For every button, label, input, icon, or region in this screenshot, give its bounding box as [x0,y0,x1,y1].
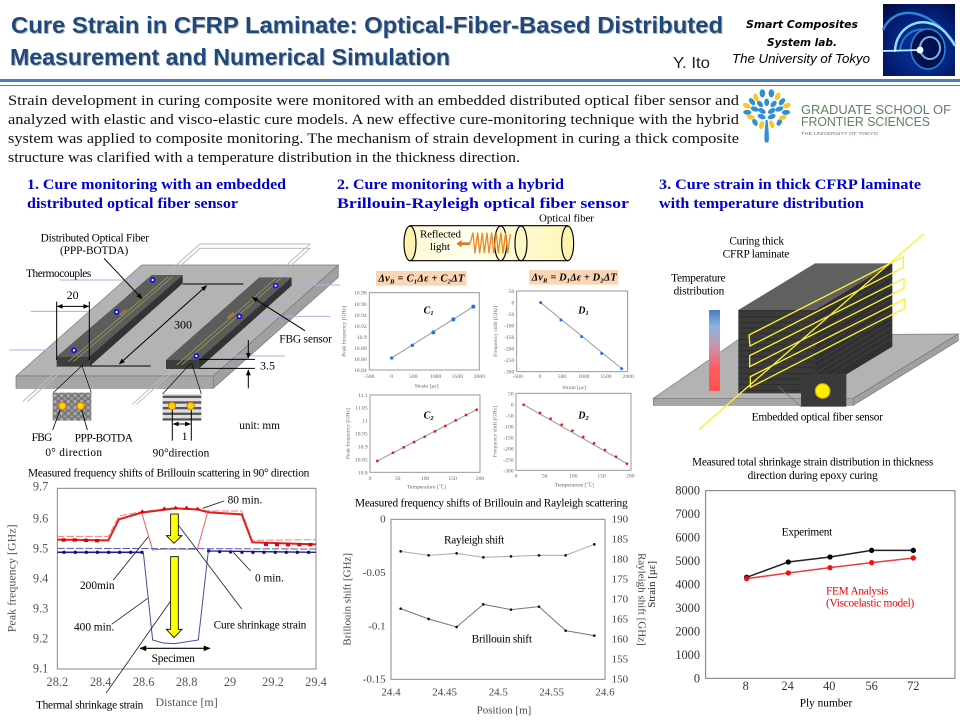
y ticks [675,484,700,685]
x ticks: 28.6 [133,675,154,689]
y ticks: 3000 [675,601,700,615]
x ticks: 24 [781,679,794,693]
diagram labels: 90°direction [153,448,210,460]
intro text block: structure was clarified with a temperature distribution in the thickness direction. [8,150,520,166]
laminate labels: distribution [674,286,725,298]
right axis ticks: 190 [612,514,629,526]
chart: C1 strain vs peak frequency: 1 [430,310,434,317]
axis titles: Ply number [800,698,852,710]
diagram labels: 300 [174,318,192,332]
chart: D1 strain vs frequency shift: 0 [511,301,514,307]
icon: lab swirl logo [883,4,955,76]
chart: C1 strain vs peak frequency: 10.9 [357,335,367,341]
intro text block: analyzed with elastic and visco-elastic cure models. A new effective cure-monitoring technique with the hybrid [8,112,740,128]
chart: D2 temperature vs frequency shift: Temperature [℃] [555,482,594,489]
diagram labels: PPP-BOTDA [75,433,134,445]
chart: D2 temperature vs frequency shift: 200 [626,474,635,480]
series: 400 min [143,551,208,644]
laminate labels: Embedded optical fiber sensor [752,412,883,424]
fiber labels [420,213,594,253]
chart: C1 strain vs peak frequency: 1500 [452,374,463,380]
diagram labels: (PPP-BOTDA) [60,245,129,257]
chart: D1 strain vs frequency shift: D [578,305,586,316]
chart: D2 temperature vs frequency shift: -300 [503,468,514,474]
chart annotations: Specimen [152,653,195,665]
x axis ticks: 24.45 [432,687,458,699]
chart: C2 temperature vs peak frequency: 50 [395,476,401,482]
chart: D1 strain vs frequency shift: -200 [504,347,514,353]
diagram: thick CFRP laminate [653,234,958,429]
chart: D2 temperature vs frequency shift: 2 [585,415,590,422]
equation: Rayleigh: R [542,277,548,284]
x axis ticks: 24.4 [381,687,401,699]
graduate school wordmark: THE UNIVERSITY OF TOKYO [801,131,879,136]
x ticks: 72 [907,679,919,693]
x axis ticks [381,687,615,699]
chart: C1 strain vs peak frequency: 10.92 [354,324,367,330]
series labels: (Viscoelastic model) [826,598,915,610]
chart: D2 temperature vs frequency shift: -100 [503,424,514,430]
x ticks [47,675,327,689]
x axis ticks: 24.55 [539,687,565,699]
equation: Rayleigh: Δε + D [569,272,601,283]
chart: C1 strain vs peak frequency [341,291,485,390]
intro text block [8,93,740,166]
left axis ticks: 0 [380,514,386,526]
chart caption: direction during epoxy curing [748,470,878,482]
chart: C1 strain vs peak frequency: 10.98 [354,291,367,297]
title: Measurement and Numerical Simulation [10,44,450,70]
cross section 0 degree [53,393,91,430]
chart: D1 strain vs frequency shift [492,289,634,391]
dimension lines [53,258,305,394]
chart annotations: 0 min. [255,572,284,584]
y ticks [33,479,48,676]
temperature gradient bar [709,310,720,391]
y ticks: 5000 [675,554,700,568]
series: FEM analysis [744,555,916,581]
chart: C1 strain vs peak frequency: 2000 [474,374,485,380]
series labels: Experiment [782,526,833,538]
intro text block: system was applied to composite monitoring. The mechanism of strain development in curing a thick composite [8,131,739,147]
chart: D1 strain vs frequency shift: -500 [512,374,523,380]
fiber labels: Optical fiber [539,213,594,225]
heading: section 3: with temperature distribution [659,196,865,212]
right axis ticks [612,514,629,686]
heading: section 1 [27,177,287,212]
chart: D1 strain vs frequency shift: Strain [με] [562,385,586,391]
thermocouple points [72,278,278,358]
x axis ticks: 24.6 [595,687,615,699]
yellow arrow: cure shrinkage [166,514,182,543]
y ticks: 9.5 [33,541,48,555]
series labels [444,534,533,645]
chart: C1 strain vs peak frequency: 10.86 [354,357,367,363]
cross section 90 degree [163,394,201,441]
right axis ticks: 150 [612,674,629,686]
right axis ticks: 185 [612,534,629,546]
chart: C2 temperature vs peak frequency [345,393,484,491]
equation: Rayleigh: = D [548,272,567,283]
chart: C2 temperature vs peak frequency: C [424,410,430,421]
double rule [0,79,960,82]
chart: C1 strain vs peak frequency: Strain [με] [415,384,439,390]
chart: D2 temperature vs frequency shift: -50 [506,413,514,419]
heading: section 2: Brillouin-Rayleigh optical fiber sensor [337,196,629,212]
chart: D1 strain vs frequency shift: -250 [504,358,514,364]
equation: Brillouin: 1 [414,278,417,285]
chart: D2 temperature vs frequency shift: D [578,410,586,421]
equation: Brillouin: ΔT [450,273,465,284]
chart: Brillouin and Rayleigh shift vs position: Brillouin shift [GHz] [342,553,354,646]
right axis ticks: 180 [612,554,629,566]
y ticks: 9.1 [33,662,48,676]
right axis ticks: 170 [612,594,629,606]
chart: D1 strain vs frequency shift: Frequency shift [GHz] [492,306,499,357]
chart: Brillouin and Rayleigh shift vs position: Rayleigh shift [GHz] [635,553,647,646]
x ticks: 28.4 [90,675,111,689]
laminate block [738,263,892,393]
axis titles: Position [m] [477,704,531,716]
diagram labels: 3.5 [260,359,275,373]
x ticks: 28.2 [47,675,68,689]
chart: C1 strain vs peak frequency: -500 [364,374,375,380]
equation: Rayleigh: 1 [567,277,570,284]
series: 0 min [57,548,316,554]
x ticks: 8 [743,679,749,693]
chart: C1 strain vs peak frequency: 500 [409,374,418,380]
fiber loops [23,244,310,404]
chart: C2 temperature vs peak frequency: 2 [429,415,434,422]
diagram labels: 1 [182,429,188,443]
diagram: specimen with embedded sensors [9,232,340,460]
graduate school wordmark: GRADUATE SCHOOL OF [801,103,951,117]
lab name [732,18,870,66]
x ticks: 29 [224,675,236,689]
chart: Brillouin and Rayleigh shift vs position [342,498,647,716]
chart: Brillouin peak frequency vs distance [4,468,327,711]
chart: D2 temperature vs frequency shift [491,391,635,489]
heading: section 2 [337,177,629,212]
intro text block: Strain development in curing composite were monitored with an embedded distributed optical fiber sensor and [8,93,740,109]
series: 80 min [57,506,316,550]
y ticks: 9.6 [33,511,48,525]
chart: D2 temperature vs frequency shift: -150 [503,435,514,441]
x ticks: 29.2 [262,675,284,689]
chart: C1 strain vs peak frequency: 0 [390,374,393,380]
chart: C2 temperature vs peak frequency: Temperature [℃] [407,484,446,491]
series labels: Brillouin shift [472,633,533,645]
y ticks: 2000 [675,624,700,638]
chart: C1 strain vs peak frequency: 10.88 [354,346,367,352]
chart caption [692,457,933,482]
yellow arrow: thermal shrinkage [166,557,182,638]
chart: total shrinkage strain vs ply number [646,457,955,710]
heading: section 3: 3. Cure strain in thick CFRP laminate [659,177,921,193]
chart annotations: Thermal shrinkage strain [36,699,144,711]
x ticks: 56 [865,679,878,693]
chart: C2 temperature vs peak frequency: 200 [476,476,484,482]
y ticks: 4000 [675,577,700,591]
chart: D1 strain vs frequency shift: 50 [509,289,514,295]
equation: Rayleigh: ΔT [603,272,617,283]
chart: C1 strain vs peak frequency: 10.84 [354,368,367,374]
chart: D2 temperature vs frequency shift: 50 [542,474,548,480]
equation: Brillouin [376,271,467,286]
diagram labels [26,232,332,460]
left axis ticks: -0.15 [363,674,386,686]
chart: D1 strain vs frequency shift: 1500 [600,374,612,380]
chart: C2 temperature vs peak frequency: 11.1 [358,393,368,399]
chart annotations: 200min [80,580,115,592]
embedded sensor cross section [778,374,846,407]
chart annotations: Cure shrinkage strain [214,619,307,631]
title [10,12,723,70]
title: Cure Strain in CFRP Laminate: Optical-Fiber-Based Distributed [11,12,723,38]
chart: C2 temperature vs peak frequency: 150 [448,476,457,482]
chart: D2 temperature vs frequency shift: Frequency shift [GHz] [491,406,498,457]
chart: Brillouin peak frequency vs distance: Distance [m] [156,695,218,709]
chart annotations: 80 min. [228,494,262,506]
axis titles: Peak frequency [GHz] [4,524,18,632]
diagram labels: FBG sensor [279,333,332,345]
y ticks: 7000 [675,507,700,521]
series labels: FEM Analysis [826,585,888,597]
chart: C2 temperature vs peak frequency: 10.8 [358,470,368,476]
chart: D1 strain vs frequency shift: 500 [558,374,566,380]
composite bar right [166,277,292,369]
laminate labels: CFRP laminate [723,249,789,261]
chart: C1 strain vs peak frequency: C [424,305,430,316]
chart: D2 temperature vs frequency shift: 100 [569,474,578,480]
icon: graduate school tree logo [742,90,791,142]
chart: D2 temperature vs frequency shift: 150 [597,474,606,480]
equation: Brillouin: = C [395,273,414,284]
diagram labels: FBG [32,432,52,444]
chart annotations: 400 min. [74,622,114,634]
chart: C1 strain vs peak frequency: 1000 [430,374,441,380]
left axis ticks: -0.05 [363,567,386,579]
diagram: optical fiber reflection [404,213,594,261]
diagram labels: Thermocouples [26,268,91,280]
x ticks: 28.8 [176,675,197,689]
leader lines [106,501,251,693]
equation: Brillouin: Δε + C [416,273,447,284]
chart: C1 strain vs peak frequency: 10.94 [354,313,367,319]
y ticks: 9.2 [33,632,48,646]
chart: C2 temperature vs peak frequency: 11.05 [355,406,368,412]
chart: D2 temperature vs frequency shift: 0 [511,402,514,408]
right axis ticks: 165 [612,614,629,626]
graduate school wordmark [801,103,951,136]
chart: C2 temperature vs peak frequency: 0 [369,476,372,482]
chart: D1 strain vs frequency shift: -300 [504,370,514,376]
right axis ticks: 160 [612,634,629,646]
series: Brillouin [399,603,596,637]
thermocouple wires [9,280,340,356]
equation: Brillouin: 2 [447,278,452,285]
chart: D2 temperature vs frequency shift: -250 [503,457,514,463]
left axis ticks [363,514,386,686]
lab name: System lab. [767,36,837,49]
y ticks: 0 [694,671,700,685]
y ticks: 1000 [675,648,700,662]
chart: D1 strain vs frequency shift: -150 [504,335,514,341]
spring wave [470,233,510,253]
diagram labels: unit: mm [239,420,280,432]
chart caption: Measured total shrinkage strain distribution in thickness [692,457,933,469]
y ticks: 6000 [675,531,700,545]
heading: section 1: distributed optical fiber sensor [27,196,238,212]
chart: D2 temperature vs frequency shift: 50 [508,391,514,397]
y ticks: 9.4 [33,571,48,585]
chart: C1 strain vs peak frequency: 10.96 [354,302,367,308]
right axis ticks: 175 [612,574,629,586]
equation: Rayleigh: 2 [599,277,604,284]
chart: D1 strain vs frequency shift: 1000 [578,374,590,380]
chart: total shrinkage strain vs ply number: Strain [με] [646,561,658,608]
fiber labels: Reflected [420,228,461,240]
chart: D1 strain vs frequency shift: 1 [586,310,589,317]
chart: C2 temperature vs peak frequency: 100 [421,476,429,482]
equation: Rayleigh [529,270,618,285]
series: Rayleigh [399,543,596,559]
author: Y. Ito [673,55,710,72]
left axis ticks: -0.1 [368,620,386,632]
chart: C1 strain vs peak frequency: Peak frequency [GHz] [341,306,348,357]
chart: C2 temperature vs peak frequency: 10.85 [355,458,368,464]
x ticks [743,679,919,693]
x ticks: 40 [823,679,835,693]
composite bar left [57,275,183,367]
chart: D2 temperature vs frequency shift: 0 [515,474,518,480]
lab name: The University of Tokyo [732,51,870,66]
plate [16,265,338,388]
series labels: Rayleigh shift [444,534,505,546]
heading: section 2: 2. Cure monitoring with a hybrid [337,177,565,193]
laminate labels [671,235,883,424]
equation: Brillouin: Δν [378,273,390,284]
chart: C2 temperature vs peak frequency: 10.95 [355,432,368,438]
chart caption: Measured frequency shifts of Brillouin and Rayleigh scattering [355,498,628,510]
chart: C2 temperature vs peak frequency: 11 [362,419,368,425]
chart: D1 strain vs frequency shift: -50 [507,312,514,318]
chart: D1 strain vs frequency shift: -100 [504,324,514,330]
y ticks: 8000 [675,484,700,498]
x axis ticks: 24.5 [489,687,508,699]
laminate labels: Curing thick [729,235,784,247]
fiber labels: light [430,241,450,253]
x ticks: 29.4 [305,675,327,689]
heading: section 3 [659,177,921,212]
specimen span arrow [140,647,210,650]
graduate school wordmark: FRONTIER SCIENCES [801,115,930,129]
optical fiber loops [699,234,923,429]
chart annotations [36,494,307,711]
laminate labels: Temperature [671,273,725,285]
diagram labels: Distributed Optical Fiber [41,232,149,244]
chart: C2 temperature vs peak frequency: 10.9 [358,445,368,451]
series labels [782,526,915,610]
lab name: Smart Composites [746,18,858,31]
plate [653,334,958,405]
chart: C2 temperature vs peak frequency: Peak frequency [GHz] [345,408,352,459]
equation: Rayleigh: Δν [532,272,543,283]
y ticks: 9.3 [33,601,48,615]
equation: Brillouin: B [389,278,395,285]
diagram labels: 0° direction [45,447,102,459]
right axis ticks: 155 [612,654,629,666]
chart: D1 strain vs frequency shift: 0 [539,374,542,380]
y ticks: 9.7 [33,479,48,493]
chart caption: Measured frequency shifts of Brillouin scattering in 90° direction [28,468,310,480]
series: experiment [744,548,916,580]
heading: section 1: 1. Cure monitoring with an embedded [27,177,287,193]
diagram labels: 20 [67,288,79,302]
chart: D2 temperature vs frequency shift: -200 [503,446,514,452]
reflected light arrow [456,240,470,247]
chart: D1 strain vs frequency shift: 2000 [623,374,634,380]
